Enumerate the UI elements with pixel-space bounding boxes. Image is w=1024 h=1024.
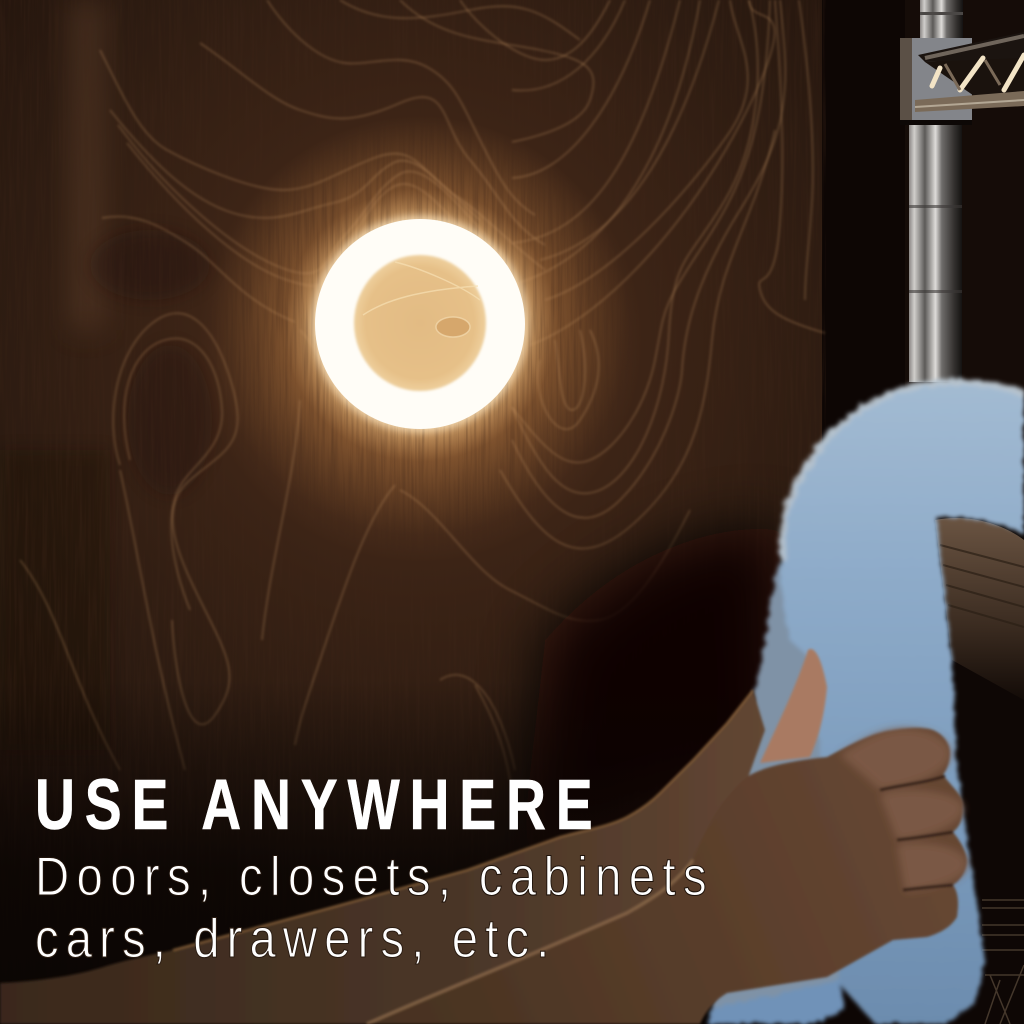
towel rear strip [712, 560, 850, 1015]
finger shading [840, 729, 950, 790]
front arm top highlight [367, 860, 693, 1024]
folded blue towel [708, 380, 1024, 1024]
icon: glowing ring light [312, 216, 528, 432]
rear arm [0, 690, 765, 1024]
subtext line 1: Doors, closets, cabinets [35, 846, 707, 907]
towel top rim [783, 382, 1024, 560]
thumb [760, 649, 827, 763]
wood grain lines [20, 0, 825, 780]
subtext line 2: cars, drawers, etc. [35, 908, 549, 969]
towel lower left lobe [708, 980, 845, 1024]
hands and arms [0, 649, 967, 1024]
wire shelf [982, 900, 1024, 1024]
towel shadow on wall [520, 525, 780, 860]
basket and dark area behind towel [935, 518, 1024, 1024]
rear arm top highlight [173, 690, 753, 950]
chrome shelf pole and bracket [900, 0, 1024, 400]
headline: USE ANYWHERE [35, 765, 593, 845]
front arm, hand back and fingers [367, 728, 967, 1024]
towel arch and front strip [780, 380, 1024, 1024]
